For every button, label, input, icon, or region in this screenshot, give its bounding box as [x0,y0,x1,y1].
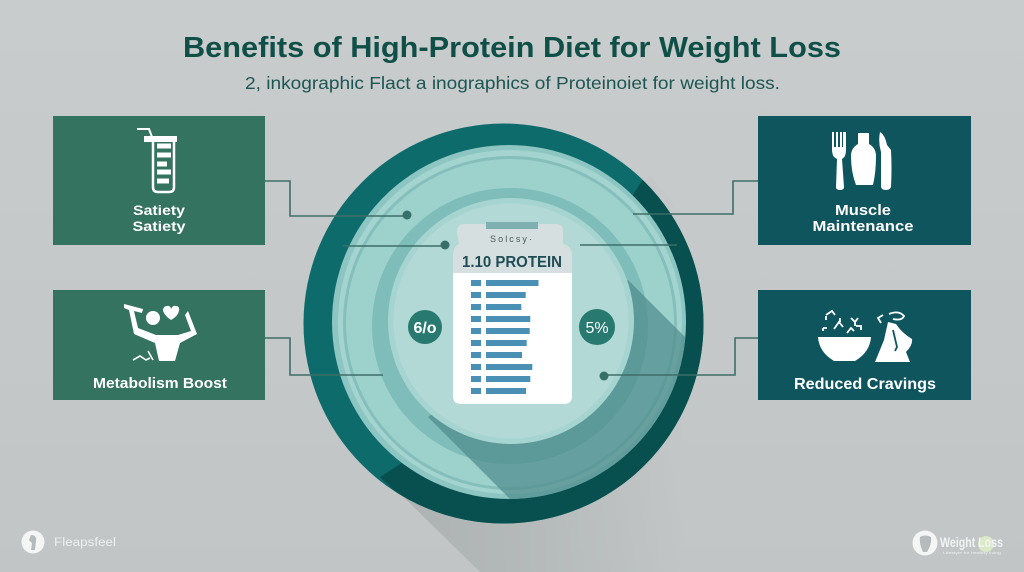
icon: flexing figure with heart [124,304,197,361]
label: brand: Solcsy· [490,234,532,244]
central plate diagram [304,124,704,572]
badge: left percentage [408,310,442,344]
icon: fork, bottle and knife [832,132,892,190]
badge: left percentage: 6/o [413,320,437,337]
icon: protein shaker [137,129,177,192]
connector: cravings to well [600,338,758,380]
connector: metabolism to ring [265,338,383,375]
label: protein: 1.10 PROTEIN [462,254,562,271]
label: reduced cravings: Reduced Cravings [794,376,936,393]
outer ring shadow [380,180,704,524]
nutrition bars [471,280,538,394]
footer logo right [912,530,1003,556]
title: Benefits of High-Protein Diet for Weight Loss [183,32,841,64]
long shadow on plate [428,280,685,499]
panel: muscle maintenance [758,116,971,245]
subtitle: 2, inkographic Flact a inographics of Proteinoiet for weight loss. [245,73,780,93]
badge: right percentage: 5% [585,320,609,337]
label: satiety: Satiety [133,202,185,218]
connector: upper left to container [343,240,450,250]
panel: metabolism boost [53,290,265,400]
label: metabolism boost: Metabolism Boost [93,375,227,392]
label: muscle: Muscle [835,202,891,219]
panel: reduced cravings [758,290,971,400]
footer logo left: Fleapsfeel [54,537,116,549]
connector: muscle to rim [633,181,758,214]
icon: bowl and seated figure [818,311,912,362]
connector: satiety to rim [265,181,412,220]
label: maintenance: Maintenance [812,218,914,235]
protein container [453,222,572,404]
badge: right percentage [579,309,615,345]
plate rim [332,145,686,499]
footer logo right: Weight Loss [940,535,1003,550]
ground shadow [378,176,760,572]
plate inner well [388,198,634,444]
plate outer ring [304,124,704,524]
footer logo right: Lifestyle for healthy living [943,550,1001,555]
connector: upper right to container [580,244,677,246]
panel: satiety [53,116,265,245]
footer logo left [22,530,116,554]
label: satiety repeated: Satiety [132,218,186,234]
